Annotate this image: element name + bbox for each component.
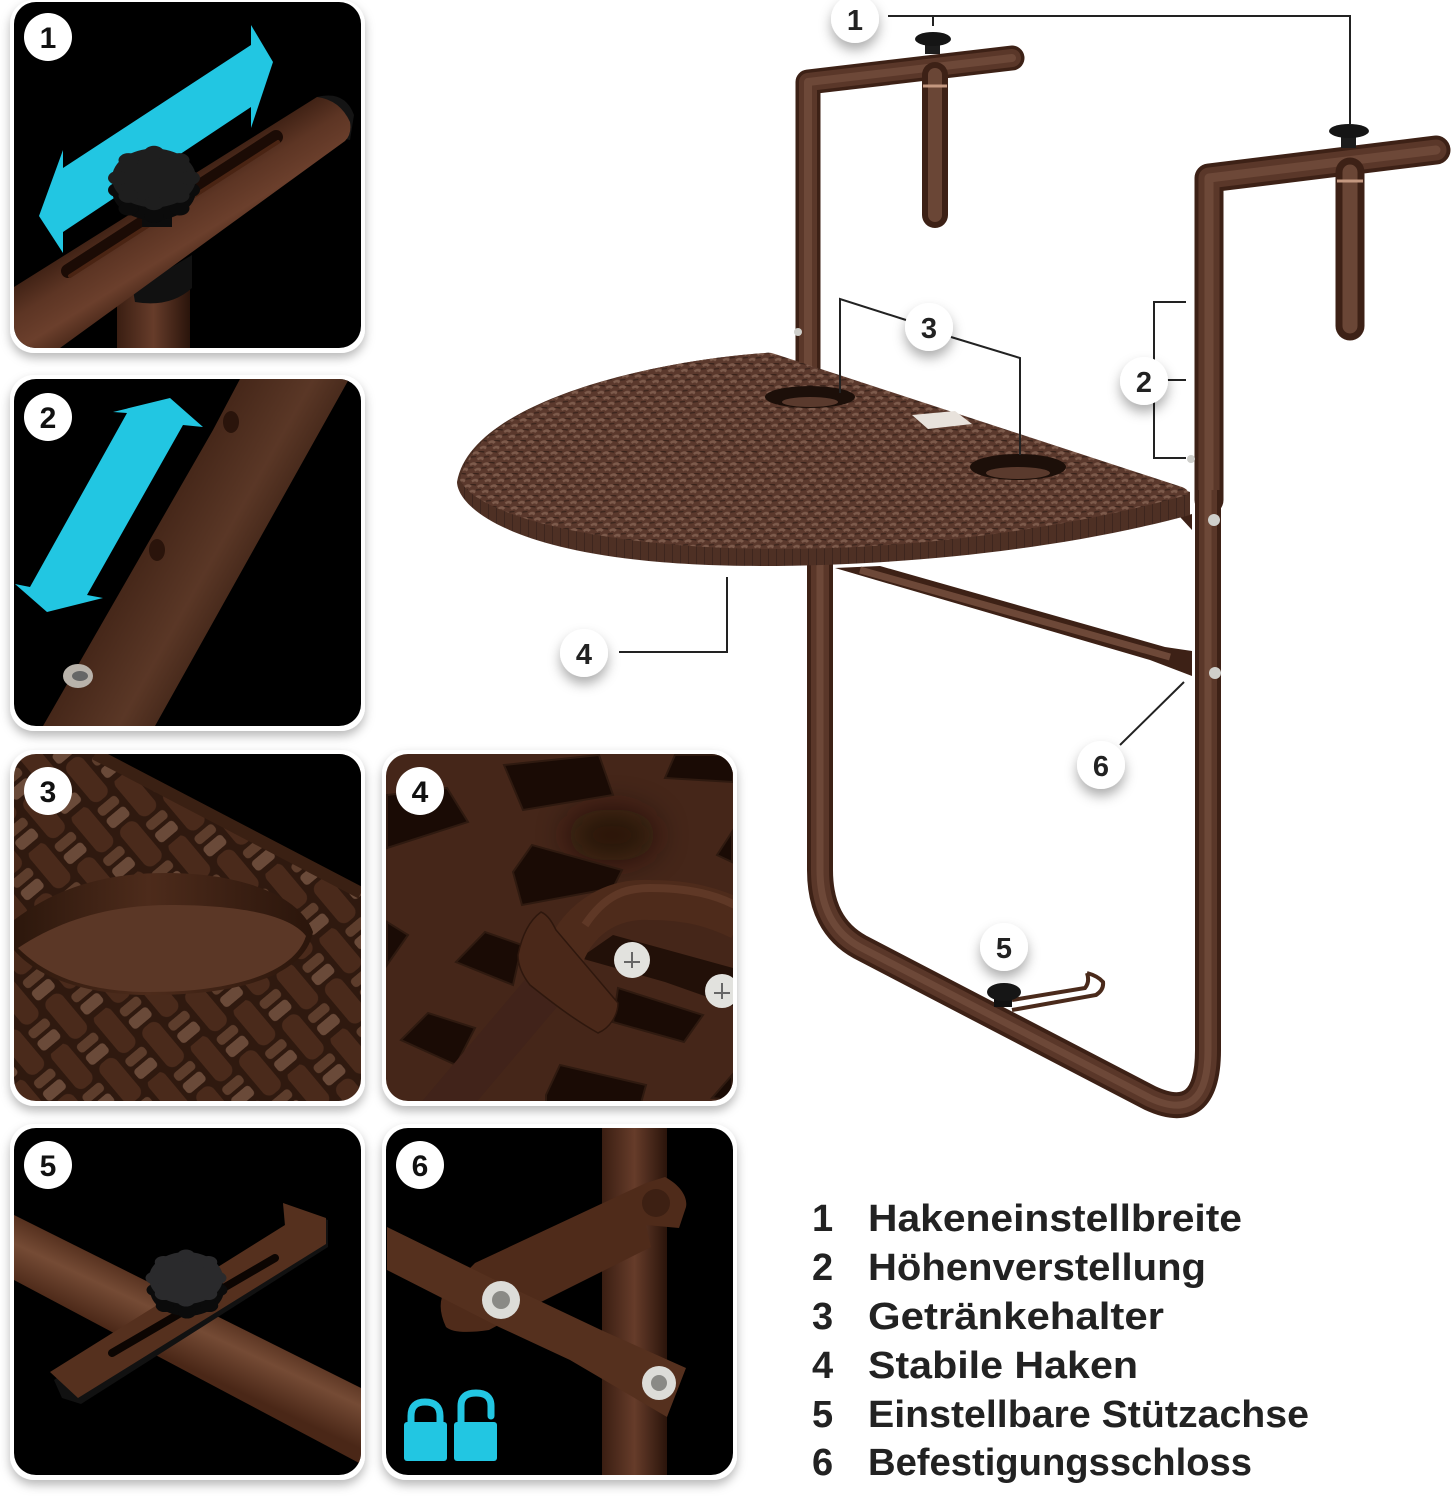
icon: open padlock: [454, 1393, 497, 1461]
table top: [457, 353, 1190, 566]
callout badge 2: 2: [1136, 367, 1152, 399]
legend item 3: 3: [812, 1296, 833, 1338]
legend item 3: Getränkehalter: [868, 1296, 1164, 1338]
callout lines: [619, 16, 1350, 745]
panel: detail 3 drink holder: [10, 750, 365, 1106]
legend item 1: Hakeneinstellbreite: [868, 1198, 1242, 1240]
panel: detail 1 hook width adjustment: [10, 0, 365, 353]
product: balcony table: [457, 32, 1436, 1105]
frame: support bracket: [1012, 973, 1103, 1010]
icon: rivets: [482, 1281, 676, 1400]
panel: detail 6 fastening lock: [382, 1124, 737, 1480]
callout badge 3: [905, 303, 953, 351]
callout badge 6: [1077, 741, 1125, 789]
number badge 3: 3: [40, 776, 56, 809]
panel: detail 4 sturdy hooks: [382, 750, 740, 1115]
callout badge 5: 5: [996, 933, 1012, 965]
icon: hook rod: [454, 880, 733, 1066]
number badge 6: [396, 1141, 444, 1189]
frame: diagonal strut: [835, 514, 1192, 676]
number badge 2: [24, 393, 72, 441]
legend item 2: 2: [812, 1247, 833, 1289]
legend item 5: 5: [812, 1394, 833, 1436]
callout badge 4: [560, 629, 608, 677]
callout badge 1: [831, 0, 879, 43]
frame: rear hanger: [808, 58, 1012, 372]
legend item 1: 1: [812, 1198, 833, 1240]
icon: black knob: [108, 146, 200, 227]
callout badge 1: 1: [847, 5, 863, 37]
panel: detail 2 height adjustment: [10, 375, 365, 731]
legend item 2: Höhenverstellung: [868, 1247, 1206, 1289]
legend item 6: 6: [812, 1442, 833, 1484]
icon: black knob: [146, 1249, 227, 1319]
number badge 6: 6: [412, 1150, 428, 1183]
legend: [812, 1198, 1309, 1484]
icon: pipe with end cap: [318, 96, 354, 140]
number badge 5: 5: [40, 1150, 56, 1183]
icon: cyan double arrow: [15, 398, 203, 612]
legend item 5: Einstellbare Stützachse: [868, 1394, 1309, 1436]
callout badge 5: [980, 923, 1028, 971]
icon: small screw: [63, 664, 93, 688]
number badge 4: 4: [412, 776, 429, 809]
number badge 3: [24, 767, 72, 815]
callout badge 2: [1120, 357, 1168, 405]
frame: front knob: [1329, 124, 1369, 148]
icon: closed padlock: [404, 1402, 447, 1461]
legend item 4: 4: [812, 1345, 833, 1387]
number badge 1: [24, 13, 72, 61]
number badge 5: [24, 1141, 72, 1189]
icon: label sticker: [912, 411, 972, 429]
icon: drink holder left: [765, 386, 855, 408]
icon: silver screws: [614, 942, 739, 1008]
callout badge 6: 6: [1093, 751, 1109, 783]
callout badge 4: 4: [576, 639, 592, 671]
frame: small knob: [987, 983, 1021, 1007]
legend item 4: Stabile Haken: [868, 1345, 1138, 1387]
table underside recesses: [387, 755, 733, 1103]
panel: detail 5 adjustable support axis: [10, 1124, 365, 1480]
number badge 1: 1: [40, 22, 56, 55]
icon: cyan double arrow: [39, 25, 273, 253]
frame: front hanger: [1209, 150, 1436, 500]
number badge 2: 2: [40, 402, 56, 435]
legend item 6: Befestigungsschloss: [868, 1442, 1252, 1484]
icon: bolts: [794, 328, 1221, 679]
icon: drink holder right: [970, 454, 1066, 480]
frame: lower loop: [820, 490, 1208, 1105]
frame: rear knob: [915, 32, 951, 54]
number badge 4: [396, 767, 444, 815]
callout badge 3: 3: [921, 313, 937, 345]
